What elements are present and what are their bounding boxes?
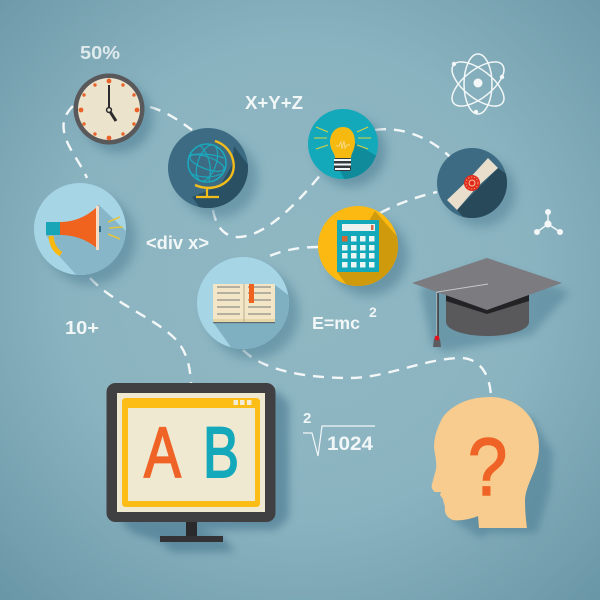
monitor stand (186, 522, 197, 536)
browser window (122, 398, 260, 507)
icon: book (197, 257, 299, 360)
question mark: ? (468, 422, 507, 513)
icon: diploma (437, 148, 516, 227)
label: E=mc squared: 2 (369, 304, 377, 320)
monitor body (106, 383, 276, 522)
letter A: A (144, 413, 181, 493)
label: 50%: 50% (80, 43, 120, 63)
icon: clock (74, 74, 153, 153)
label: E=mc squared (312, 304, 377, 333)
head with question mark (432, 397, 553, 538)
icon: graduation cap (412, 258, 570, 352)
label: X+Y+Z: X+Y+Z (245, 93, 303, 113)
label: square root of 1024: 1024 (327, 434, 373, 455)
label: square root of 1024: 2 (303, 410, 311, 427)
monitor shadow (120, 390, 289, 552)
icon: atom (445, 54, 511, 114)
icon: molecule (534, 209, 563, 235)
monitor (106, 383, 289, 552)
icon: light bulb (308, 109, 386, 190)
icon: calculator (318, 206, 408, 296)
label: div x: <div x> (146, 233, 209, 253)
letter B: B (203, 414, 239, 493)
label: E=mc squared: E=mc (312, 313, 360, 333)
dashed paths (64, 106, 491, 397)
icon: globe (168, 128, 258, 218)
label: 10+: 10+ (65, 318, 99, 338)
label: square root of 1024 (303, 410, 375, 456)
window buttons (234, 400, 252, 405)
monitor screen (117, 393, 265, 512)
icon: megaphone (34, 183, 136, 290)
